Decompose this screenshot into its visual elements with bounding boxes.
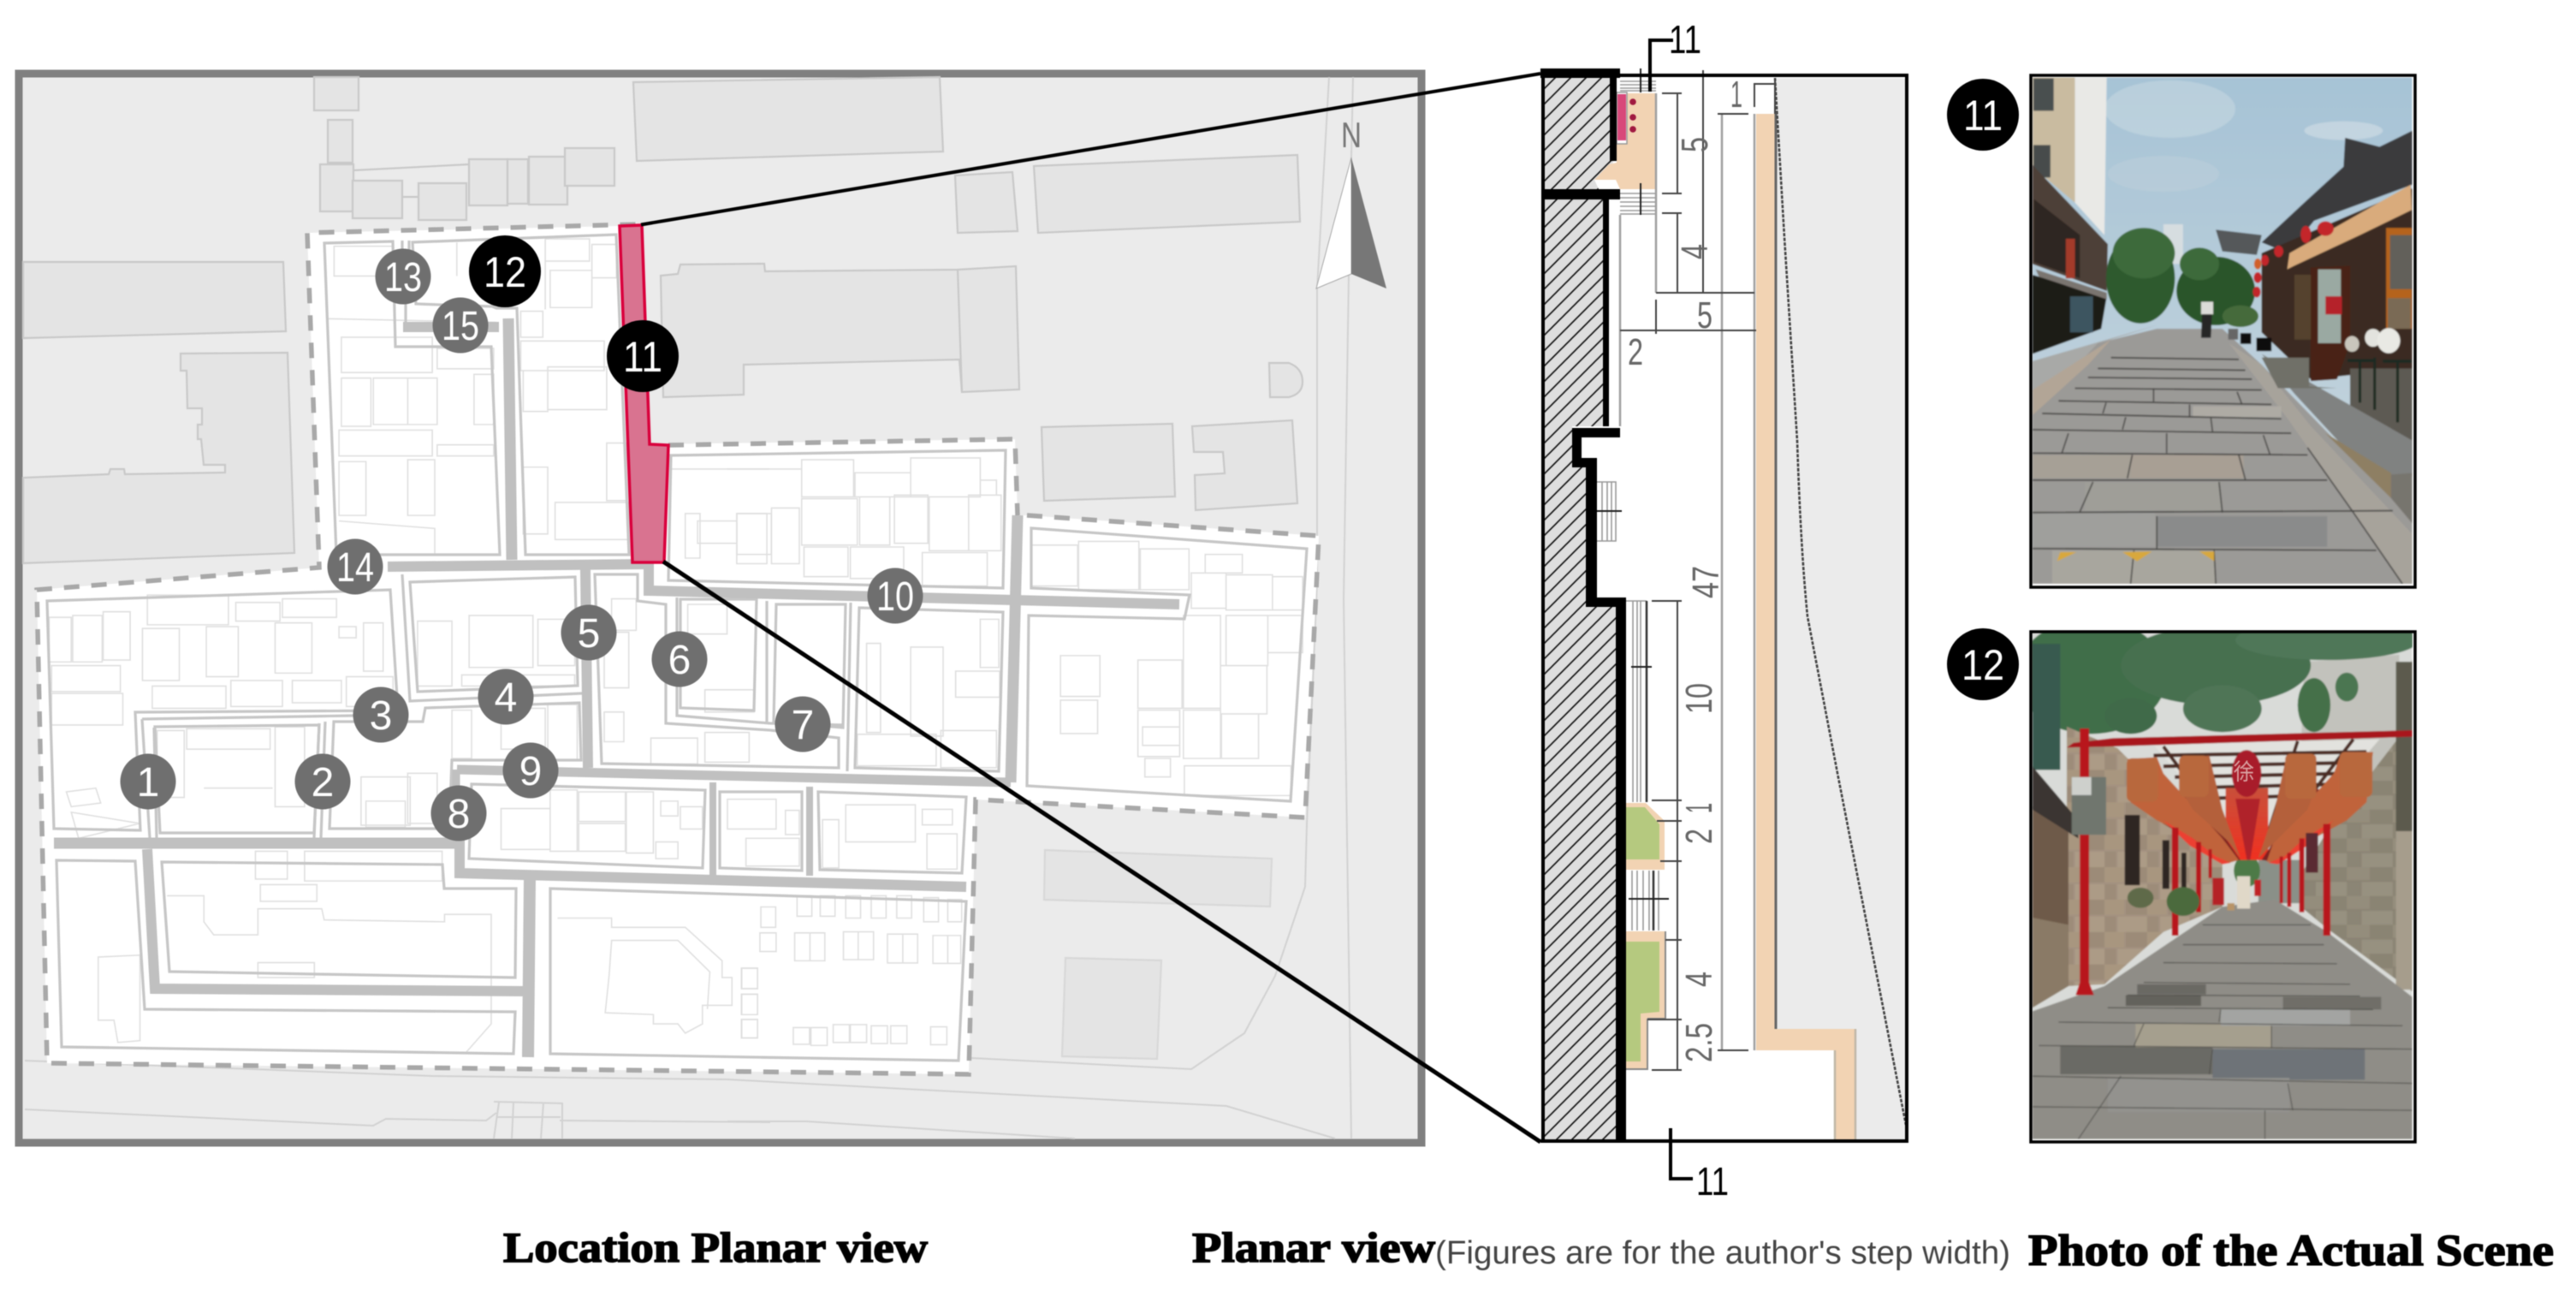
marker 2: 2 (312, 760, 334, 806)
caption: planar view with note: (Figures are for the author's step width) (1435, 1235, 2010, 1271)
lantern character: 徐 (2234, 759, 2254, 785)
dimension lines (1620, 70, 1775, 1070)
marker 9 (503, 743, 558, 798)
photo label 12 (1947, 628, 2019, 700)
steps and stairs (1597, 68, 1669, 930)
wall thick outlines (1540, 68, 1626, 1143)
north arrow (1316, 115, 1386, 288)
section mark bottom: 11 (1696, 1159, 1729, 1204)
photo label 11: 11 (1963, 92, 2003, 140)
marker 7 (775, 697, 830, 752)
site area (37, 225, 1319, 1074)
dimension numbers: 4 (1674, 244, 1716, 259)
photo 12 border (2031, 632, 2415, 1142)
marker 12 highlighted (469, 235, 541, 307)
block perimeter lines (47, 235, 1307, 1061)
photo: lane 12 scene (2016, 619, 2419, 1142)
marker 8 (431, 786, 486, 841)
marker 10 (868, 568, 923, 623)
marker 14: 14 (336, 545, 374, 591)
pink stall detail (1617, 92, 1636, 144)
marker 2 (294, 753, 351, 810)
marker 7: 7 (792, 703, 814, 748)
marker 14 (327, 539, 383, 594)
marker 11 highlighted: 11 (623, 333, 662, 381)
context buildings (23, 77, 1303, 1059)
photo 11 border (2031, 75, 2415, 587)
location markers (120, 235, 923, 841)
dimension numbers: 2.5 (1678, 1023, 1720, 1062)
marker 3: 3 (370, 693, 392, 739)
dimension numbers: 10 (1678, 683, 1720, 714)
marker 9: 9 (519, 749, 542, 794)
marker 12 highlighted: 12 (484, 248, 526, 296)
ground area beyond lane (1775, 78, 1906, 1140)
dimension numbers: 1 (1678, 803, 1720, 813)
marker 5 (561, 604, 616, 661)
gray edge and dimension lines (1620, 93, 1855, 1140)
site boundary dashed line (37, 224, 1319, 1074)
photo: lane 11 scene (2031, 75, 2415, 587)
marker 10: 10 (876, 574, 914, 620)
marker 4: 4 (495, 675, 517, 721)
context road lines (25, 77, 1353, 1138)
marker 11 highlighted (607, 320, 679, 392)
marker 13 (375, 248, 431, 305)
marker 1 (120, 753, 176, 810)
marker 1: 1 (137, 760, 159, 806)
dimension numbers: 2 (1678, 829, 1720, 844)
marker 5: 5 (578, 611, 600, 657)
marker 15 (433, 298, 488, 353)
photo label 11 (1947, 79, 2019, 151)
marker 13: 13 (384, 255, 422, 300)
marker 6: 6 (668, 638, 691, 683)
marker 6 (652, 632, 707, 687)
dimension numbers: 2 (1628, 331, 1643, 373)
site building outlines (49, 239, 1303, 1052)
caption: planar view with note: Planar view (1192, 1223, 1435, 1271)
caption: photo of the actual scene: Photo of the Actual Scene (2028, 1227, 2554, 1275)
dimension numbers: 1 (1730, 74, 1742, 116)
plan outer border (1540, 75, 1907, 1141)
section mark top (1650, 17, 1701, 92)
caption: location planar view: Location Planar view (503, 1223, 928, 1271)
section mark bottom (1671, 1128, 1729, 1204)
map background frame (19, 74, 1422, 1143)
panel: detail planar view (1540, 17, 1907, 1204)
dimension numbers (1628, 74, 1742, 1062)
marker 15: 15 (442, 304, 479, 349)
photo label 12: 12 (1962, 641, 2004, 689)
planting beds (1626, 803, 1665, 1069)
marker 3 (353, 687, 409, 743)
caption: planar view with note (1192, 1223, 2010, 1271)
dimension numbers: 5 (1674, 137, 1716, 152)
beige paving areas (1594, 93, 1855, 1140)
leader lines from strip to detail plan (641, 74, 1540, 1142)
main alley network (54, 318, 1179, 1057)
panel: location planar view map (19, 74, 1422, 1143)
dimension numbers: 47 (1685, 566, 1727, 598)
section mark top: 11 (1669, 17, 1701, 62)
property line dashed curve (1775, 78, 1906, 1125)
dimension numbers: 4 (1678, 972, 1720, 987)
highlighted lane 11 strip (620, 225, 668, 562)
marker 4 (478, 669, 534, 724)
north arrow: N (1341, 115, 1362, 155)
marker 8: 8 (448, 792, 470, 837)
hatched wall mass (1544, 78, 1616, 1141)
dimension numbers: 5 (1697, 294, 1712, 336)
